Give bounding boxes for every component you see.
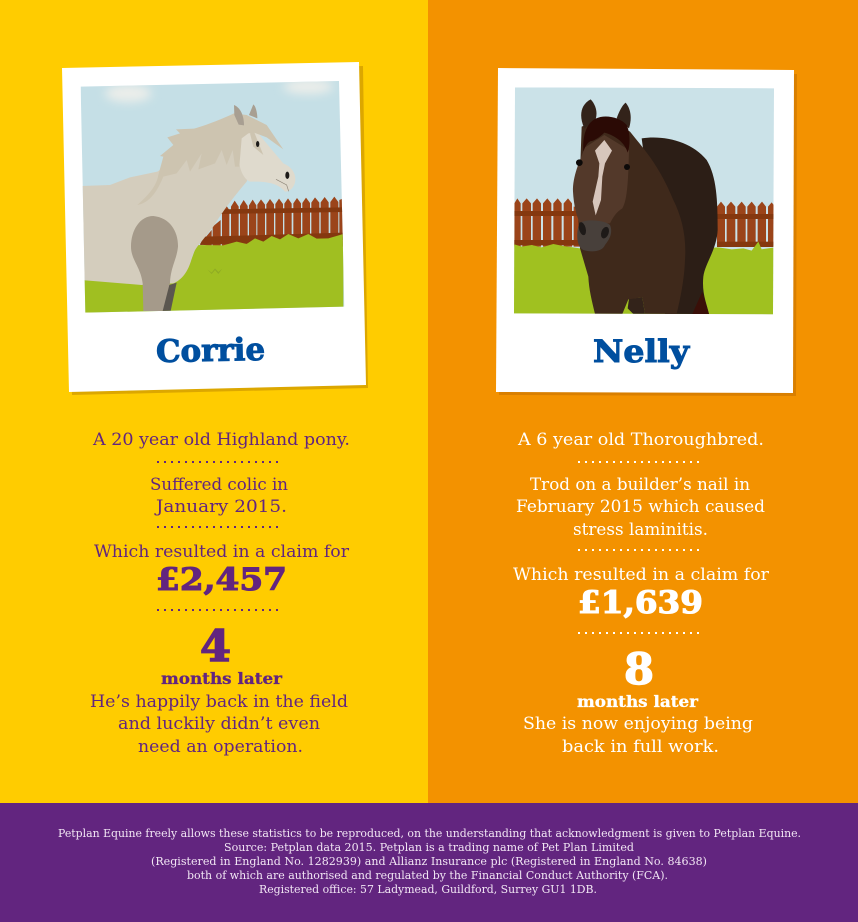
text block: Corrie story: need an operation. [138, 737, 303, 757]
text block: legal notice: Petplan Equine freely allows these statistics to be reproduced, on the understanding that acknowledgment is given to Petplan Equine. [58, 827, 801, 840]
text block: Corrie story [90, 430, 350, 757]
text block: legal notice: (Registered in England No. 1282939) and Allianz Insurance plc (Registered in England No. 84638) [151, 855, 707, 868]
panel: Nelly polaroid [496, 68, 797, 396]
stat: months number: 8 [624, 645, 654, 695]
stat: months number: 4 [200, 622, 231, 672]
stat: claim amount: £2,457 [156, 562, 287, 598]
text block: Nelly story: stress laminitis. [573, 520, 708, 540]
description: breed: A 6 year old Thoroughbred. [517, 430, 764, 450]
illustration: Nelly the horse in a field [512, 85, 778, 318]
description: outcome: She is now enjoying being [523, 714, 753, 734]
text block: legal notice [58, 827, 801, 896]
text block: Corrie story: January 2015. [154, 497, 287, 517]
name: Corrie: Corrie [156, 332, 265, 370]
stat: claim amount: £1,639 [578, 585, 703, 621]
description: illness: Suffered colic in [150, 475, 288, 495]
label: months later: months later [161, 669, 283, 688]
label: months later: months later [577, 692, 699, 711]
text block: legal notice: both of which are authorised and regulated by the Financial Conduct Authority (FCA). [187, 869, 668, 882]
panel: Corrie polaroid [62, 62, 368, 395]
description: injury: Trod on a builder’s nail in [530, 475, 750, 495]
panel: Corrie yellow background [0, 0, 428, 803]
panel: Nelly orange background [428, 0, 858, 803]
text block: Corrie story: and luckily didn’t even [118, 714, 320, 734]
text block: legal notice: Registered office: 57 Ladymead, Guildford, Surrey GU1 1DB. [259, 883, 597, 896]
description: breed: A 20 year old Highland pony. [92, 430, 350, 450]
text block: Nelly story: February 2015 which caused [516, 497, 765, 517]
description: claim intro: Which resulted in a claim for [94, 542, 350, 562]
text block: legal notice: Source: Petplan data 2015. Petplan is a trading name of Pet Plan Limited [224, 841, 634, 854]
description: outcome: He’s happily back in the field [90, 692, 348, 712]
description: claim intro: Which resulted in a claim for [513, 565, 770, 585]
panel: footer [0, 803, 858, 922]
illustration: Corrie the pony in a field [77, 77, 350, 317]
text block: Nelly story: back in full work. [562, 737, 719, 757]
name: Nelly: Nelly [593, 334, 690, 370]
text block: Nelly story [513, 430, 770, 757]
